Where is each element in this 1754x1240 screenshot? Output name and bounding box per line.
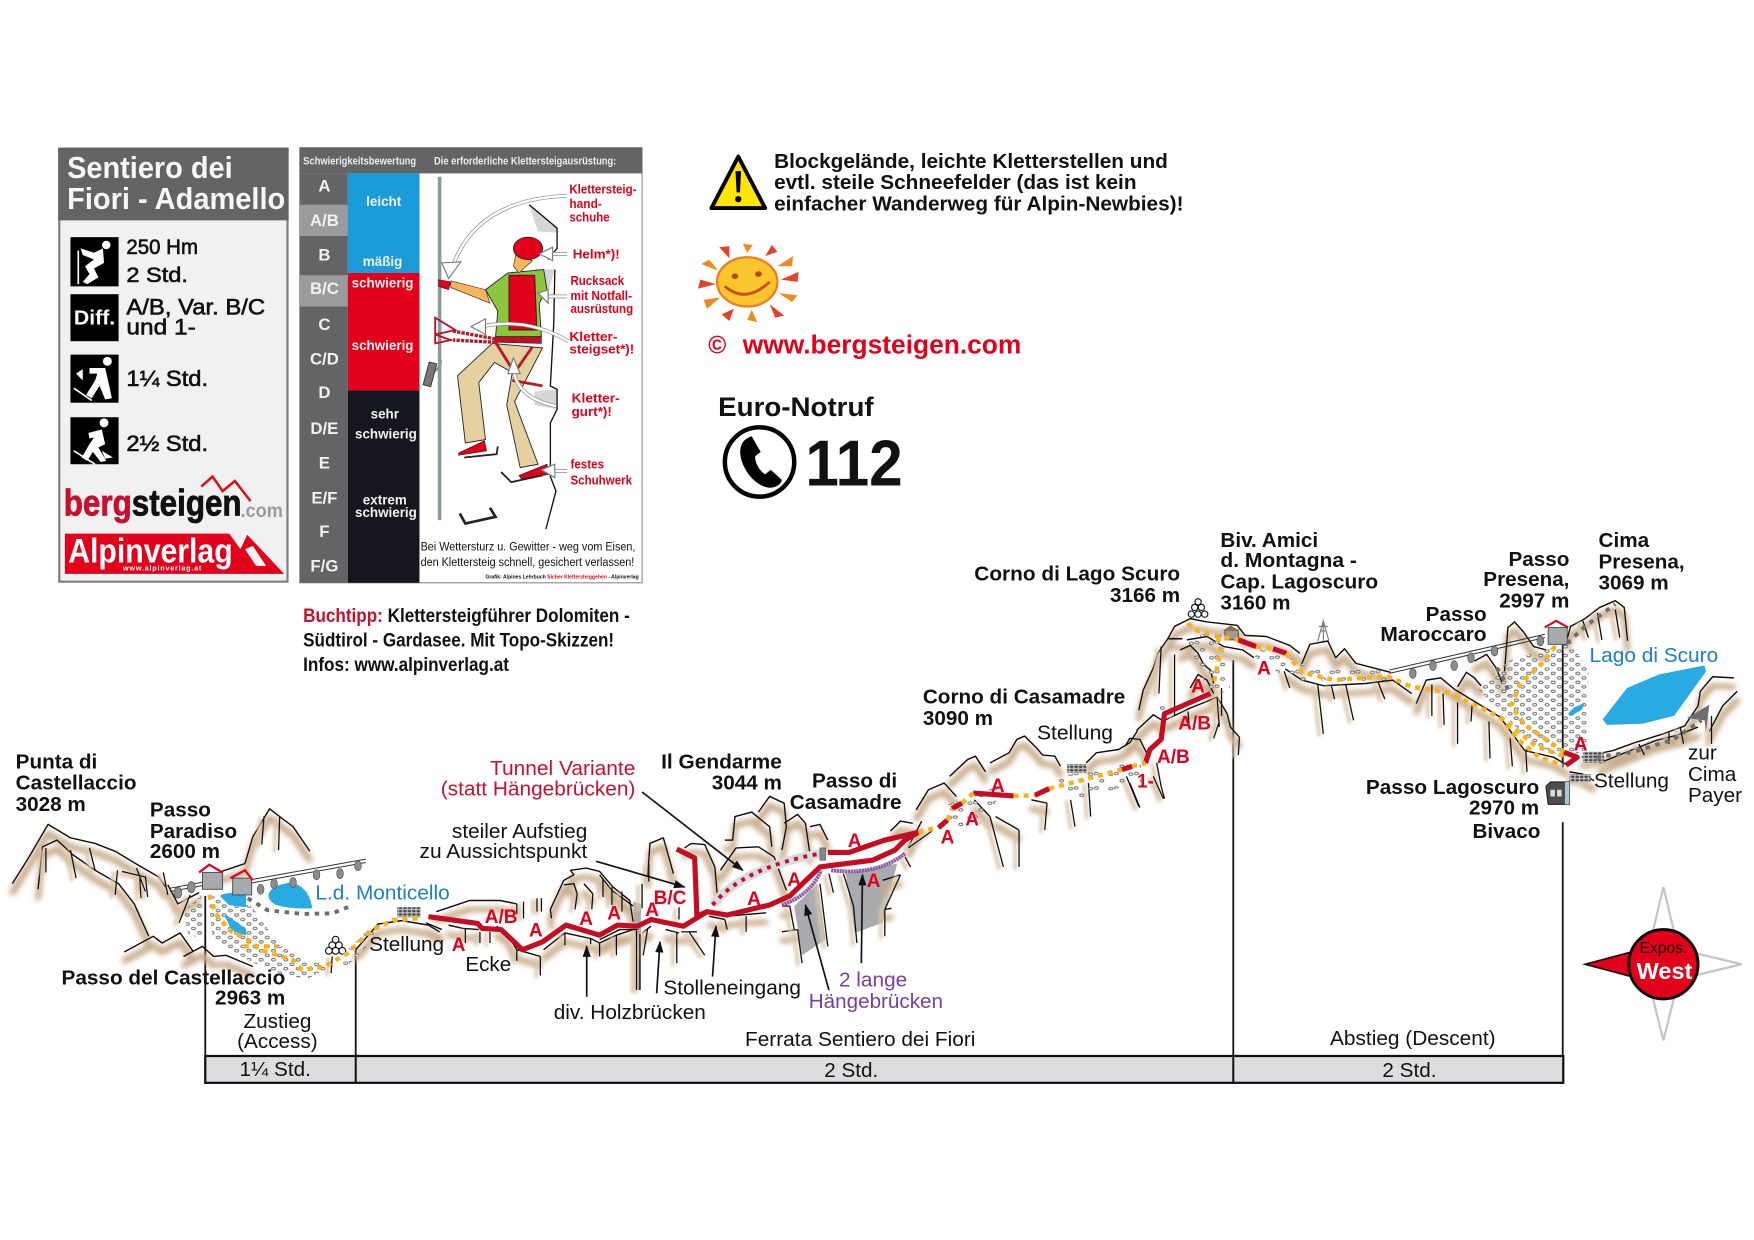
icon: access walker [70,355,119,403]
label: Hängebrücken: Hängebrücken [809,990,943,1013]
difficulty grade column: C [318,315,330,334]
icon: phone [725,427,794,497]
difficulty levels colour bar: schwierig [352,275,413,290]
difficulty grade column: A/B [310,211,339,230]
header bar: Die erforderliche Klettersteigausrüstung: [434,155,616,167]
route: ferrata main line [428,640,1577,950]
label: Hängebrücken: 2 lange [839,969,907,992]
label: Stellung right: Stellung [1594,770,1669,793]
label: Passo del Castellaccio: Passo del Castellaccio [62,966,285,989]
time table: 2 Std. [1382,1059,1436,1082]
heading: emergency call: Euro-Notruf [718,392,874,422]
text: emergency number: 112 [805,426,903,499]
time table: 1¼ Std. [240,1058,311,1081]
label: Passo di Casamadre: Passo di [812,770,897,793]
difficulty levels colour bar: sehr [371,406,400,421]
label: Passo Presena: 2997 m [1499,589,1569,612]
grade markers: A/B [1157,747,1190,768]
difficulty grade column: B/C [310,279,339,298]
grade markers: A [747,889,761,910]
grade markers: 1- [1137,772,1154,793]
difficulty levels colour bar: mäßig [363,254,402,269]
arrows: route annotations [587,792,862,997]
label: Biv. Amici: Biv. Amici [1220,529,1318,552]
label: Passo Paradiso: Paradiso [150,820,237,843]
vertical section lines [205,643,1563,1083]
equipment labels: Helm*)! [573,246,620,261]
grade markers: A [1574,735,1588,756]
route: descent [1188,604,1709,765]
label: Passo di Casamadre: Casamadre [790,791,902,814]
text: book tip: Buchtipp: Klettersteigführer Dolomiten - [303,606,630,627]
section labels: (Access) [237,1030,318,1053]
label: zur Cima Payer [1688,742,1742,807]
icon: difficulty [70,294,119,341]
text: difficulty rating [126,294,265,339]
equipment labels: Kletter- [569,329,617,344]
grade markers: A [645,900,659,921]
rock spikes [46,610,1711,990]
label: Il Gendarme: Il Gendarme [661,750,782,773]
icon: bivouac hut [1546,782,1569,804]
text: terrain warning: Blockgelände, leichte Kletterstellen und [774,150,1168,173]
difficulty grade column: B [318,246,330,265]
grade markers: A [529,920,543,941]
arrows: equipment callouts [442,196,568,478]
grade markers: A [1257,659,1271,680]
route: access path [209,895,418,970]
icon: sun logo [698,244,799,322]
heading: tour title: Fiori - Adamello [67,183,285,216]
text: book tip [303,606,630,676]
logo: Alpinverlag: Alpinverlag [68,533,233,571]
difficulty levels colour bar: schwierig [355,505,417,520]
text: descent time: 2½ Std. [126,431,208,456]
section labels: Ferrata Sentiero dei Fiori [745,1028,975,1051]
label: Tunnel Variante [441,757,635,800]
link: website: © [708,332,726,359]
text: storm warning: Grafik: Alpines Lehrbuch Sicher Klettersteiggehen - Alpinverlag [485,574,639,580]
label: Stolleneingang: Stolleneingang [663,976,801,999]
label: Cima Presena: Cima [1599,529,1650,552]
label: Passo Presena [1483,548,1569,612]
text: storm warning [421,540,639,580]
difficulty grade column: A [318,176,330,195]
label: Biv. Amici: 3160 m [1220,592,1291,615]
label: Corno di Casamadre [923,686,1125,730]
label: Cima Presena: 3069 m [1599,572,1669,595]
label: Biv. Amici: d. Montagna - [1220,549,1357,572]
difficulty levels colour bar: schwierig [352,338,413,353]
icon: ascent climber [70,237,119,286]
text: difficulty rating: und 1- [126,314,196,339]
equipment labels: festes [570,457,604,472]
difficulty grade column: C/D [310,350,339,369]
label: L.d. Monticello: L.d. Monticello [315,881,450,904]
illustration: climber on via ferrata [423,177,557,529]
text: access time: 1¼ Std. [126,366,208,391]
grade markers: A [965,810,979,831]
Stellung emplacements [397,752,1604,917]
label: Corno di Lago Scuro [974,563,1180,607]
grade markers: A [1191,676,1205,697]
text: terrain warning [774,150,1184,215]
label: Passo Maroccaro: Maroccaro [1380,623,1487,646]
label: Passo Presena: Presena, [1483,568,1569,591]
text: book tip: Südtirol - Gardasee. Mit Topo-Skizzen! [303,631,614,652]
label: Biv. Amici [1220,529,1378,615]
label: Passo del Castellaccio: 2963 m [215,987,285,1010]
label: Il Gendarme: 3044 m [712,772,782,795]
label: Punta di Castellaccio [16,750,136,816]
logo: Alpinverlag: www.alpinverlag.at [122,564,202,573]
label: steiler Aufstieg [419,820,588,863]
label: Hängebrücken [809,969,943,1013]
text: height and time: 2 Std. [126,263,188,287]
panel: difficulty scale and equipment [300,148,642,583]
grade markers: A [848,831,862,852]
grade markers: A [452,935,466,956]
label: steiler Aufstieg: steiler Aufstieg [452,820,587,843]
equipment labels: Klettersteig- [569,182,636,197]
label: Tunnel Variante: Tunnel Variante [490,757,635,780]
text: height and time: 250 Hm [126,235,198,259]
label: Corno di Casamadre: Corno di Casamadre [923,686,1125,709]
label: Corno di Casamadre: 3090 m [923,707,993,730]
grade markers: A [941,827,955,848]
equipment labels: steigset*)! [569,341,634,356]
label: Lago di Scuro: Lago di Scuro [1590,644,1718,667]
label: Passo Maroccaro: Passo [1426,603,1487,626]
label: Corno di Lago Scuro: Corno di Lago Scuro [974,563,1180,586]
label: Passo Paradiso: Passo [150,799,211,822]
difficulty levels colour bar: extrem [363,493,407,508]
hanging bridges [782,854,905,905]
label: zur Cima Payer: Cima [1688,763,1737,786]
difficulty grade column: E/F [311,488,337,507]
text: storm warning: Bei Wettersturz u. Gewitter - weg vom Eisen, [421,540,635,553]
label: Stellung: Stellung [369,933,444,956]
difficulty grade column: E [319,454,330,473]
label: Corno di Lago Scuro: 3166 m [1110,584,1180,607]
label: Stellung upper: Stellung [1037,721,1113,744]
text: difficulty rating: A/B, Var. B/C [126,294,265,319]
difficulty grade column: D [318,383,330,402]
heading: tour title: Sentiero dei [67,152,233,185]
label: Passo Lagoscuro: Passo Lagoscuro [1366,776,1539,799]
text: height and time [126,235,198,287]
label: Punta di Castellaccio: Punta di [16,750,97,773]
rock ridges [12,601,1737,966]
equipment labels: Schuhwerk [570,472,633,487]
label: Passo Presena: Passo [1508,548,1569,571]
pylon [1318,621,1329,641]
label: Passo Maroccaro [1380,603,1487,646]
route: tunnel variant [713,848,826,905]
logo: bergsteigen.com: bergsteigen [64,483,242,524]
label: Cima Presena [1599,529,1685,595]
label: Il Gendarme [661,750,782,795]
label: Passo Lagoscuro: Bivaco [1472,820,1540,843]
labels: peaks and passes [16,529,1742,1024]
scree fields [183,630,1588,979]
label: Holzbrücken: div. Holzbrücken [554,1001,706,1024]
boulder piles [326,599,1208,954]
equipment labels: schuhe [569,209,610,224]
compass: exposition west [1585,887,1742,1040]
label: Biv. Amici: Cap. Lagoscuro [1220,570,1378,593]
text: storm warning: den Klettersteig schnell, gesichert verlassen! [421,556,634,569]
cable cars right [1389,634,1545,678]
time table: 2 Std. [824,1059,878,1082]
equipment labels: ausrüstung [570,301,633,316]
cable cars left [170,859,366,898]
equipment labels: Rucksack [570,273,625,288]
grade markers: B/C [654,888,687,909]
equipment labels: Kletter- [572,391,620,406]
grade markers: A [787,870,801,891]
label: Punta di Castellaccio: Castellaccio [16,772,136,795]
grade markers: A/B [1178,713,1211,734]
text: book tip: Infos: www.alpinverlag.at [303,655,510,676]
label: Passo Paradiso [150,799,237,863]
difficulty grade column: F/G [310,557,338,576]
icon: difficulty: Diff. [74,307,115,329]
icon: warning triangle [711,157,765,208]
lake: Monticello [221,884,311,934]
difficulty grade column [300,173,348,583]
grade markers: A [991,776,1005,797]
panel: tour summary [58,148,289,582]
header bar [300,148,642,173]
icon: descent walker [70,417,119,464]
logo: bergsteigen.com: .com [241,501,283,522]
label: steiler Aufstieg: zu Aussichtspunkt [419,840,588,863]
text: terrain warning: einfacher Wanderweg für Alpin-Newbies)! [774,192,1184,215]
time table [205,1056,1563,1083]
section labels: Zustieg [243,1010,311,1033]
lake: Lago di Scuro [1569,667,1705,724]
mountain profile [12,599,1737,990]
equipment labels: hand- [569,196,602,211]
label: Passo Lagoscuro: 2970 m [1469,796,1539,819]
equipment labels: gurt*)! [572,404,612,419]
equipment labels: mit Notfall- [570,288,632,303]
header bar: Schwierigkeitsbewertung [303,155,416,167]
grade markers: A [867,871,881,892]
difficulty grade column: F [319,522,330,541]
text: terrain warning: evtl. steile Schneefelder (das ist kein [774,171,1137,194]
difficulty levels colour bar [348,173,419,583]
grade markers: A/B [485,907,518,928]
heading: tour title [67,152,285,216]
grade markers [452,659,1588,956]
label: Punta di Castellaccio: 3028 m [16,793,86,816]
label: zur Cima Payer: zur [1688,742,1717,765]
label: Passo di Casamadre [790,770,902,814]
bridge chasm shadows [633,864,897,990]
difficulty grade column: D/E [310,419,338,438]
compass: exposition west: West [1637,958,1693,984]
difficulty levels colour bar: schwierig [355,427,417,442]
difficulty levels colour bar: leicht [366,194,402,209]
label: Cima Presena: Presena, [1599,550,1685,573]
label: Tunnel Variante: (statt Hängebrücken) [441,777,635,800]
grade markers: A [579,909,593,930]
compass: exposition west: Expos. [1639,940,1687,957]
huts and stations [199,621,1568,895]
label: Passo Paradiso: 2600 m [150,840,220,863]
section labels: Abstieg (Descent) [1330,1027,1496,1050]
label: zur Cima Payer: Payer [1688,784,1742,807]
label: Passo Lagoscuro [1366,776,1540,843]
label: Ecke: Ecke [465,953,511,976]
equipment labels [569,182,636,487]
section labels [237,1010,1496,1053]
link: website: www.bergsteigen.com [742,331,1021,359]
label: Passo del Castellaccio [62,966,285,1010]
grade markers: A [607,904,621,925]
